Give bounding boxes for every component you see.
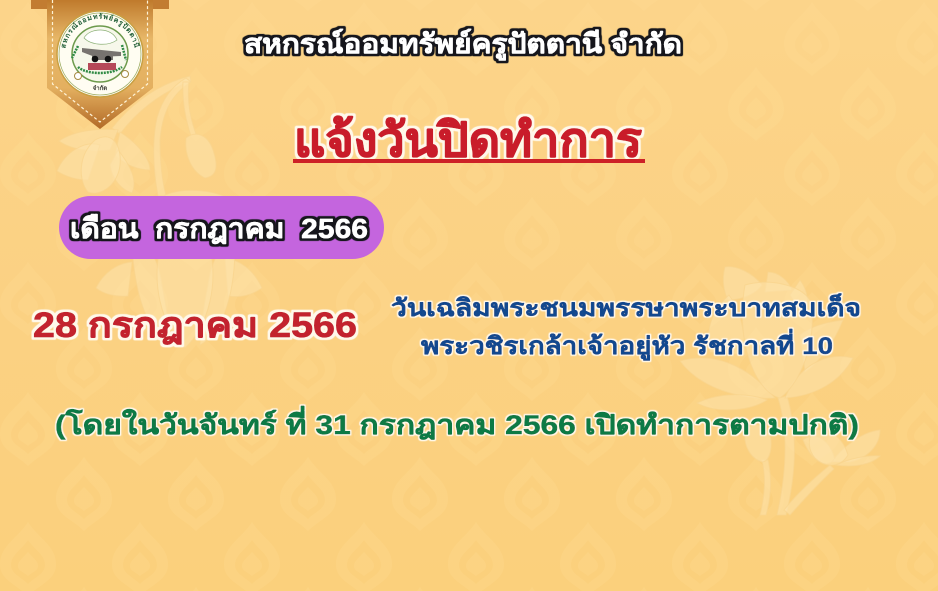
reopening note: (โดยในวันจันทร์ ที่ 31 กรกฎาคม 2566 เปิดทำการตามปกติ) (55, 405, 859, 440)
occasion text: พระวชิรเกล้าเจ้าอยู่หัว รัชกาลที่ 10 (421, 328, 833, 361)
organisation name: สหกรณ์ออมทรัพย์ครูปัตตานี จำกัด (244, 28, 682, 61)
seal (56, 10, 144, 98)
lotus watermark: right (680, 267, 880, 515)
seal name (65, 19, 135, 62)
seal suffix: จำกัด (93, 84, 107, 92)
ribbon tabs (31, 0, 169, 9)
ribbon badge (31, 0, 169, 129)
lotus watermark: left (57, 76, 262, 348)
title underline (293, 159, 645, 163)
occasion text: วันเฉลิมพระชนมพรรษาพระบาทสมเด็จ (391, 293, 861, 322)
closure date: 28 กรกฎาคม 2566 (33, 306, 357, 345)
ribbon stitching (52, 0, 148, 122)
title: แจ้งวันปิดทำการ (294, 113, 642, 166)
ribbon body (47, 0, 153, 129)
seal: สหกรณ์ออมทรัพย์ครูปัตตานี (62, 13, 140, 48)
occasion text (391, 293, 861, 361)
month label: เดือน กรกฎาคม 2566 (70, 213, 368, 245)
month pill (59, 196, 384, 259)
